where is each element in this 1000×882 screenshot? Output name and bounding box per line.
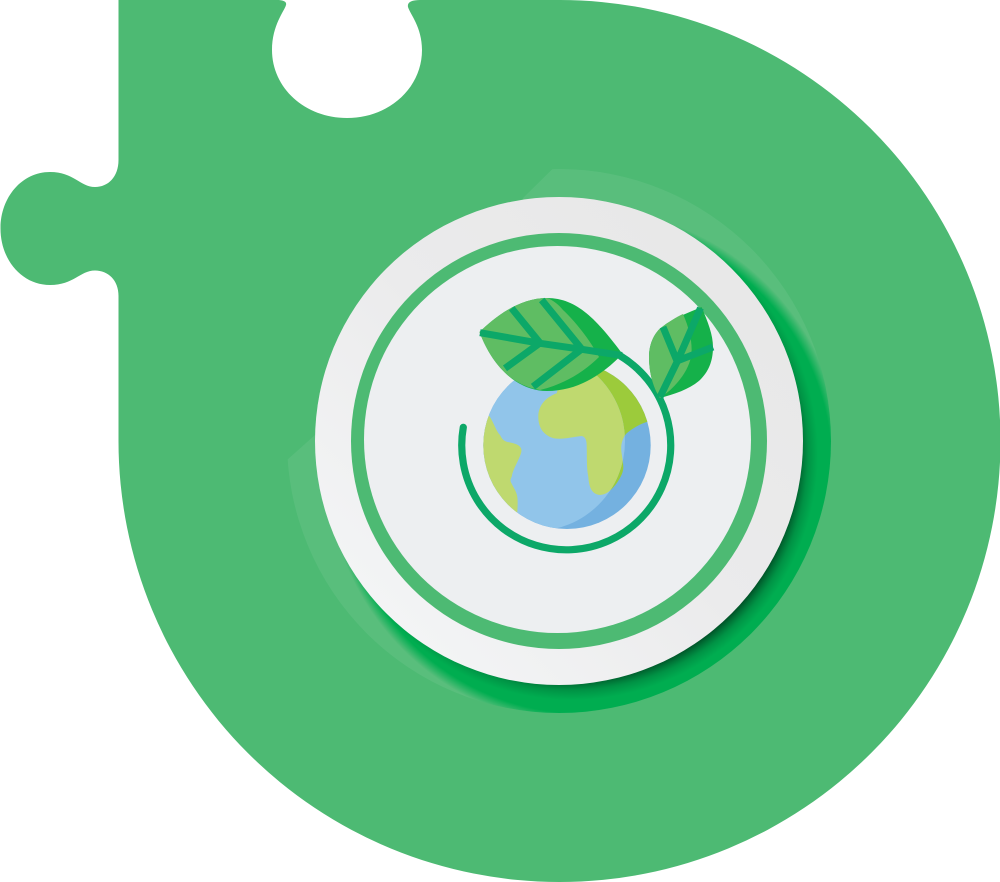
large leaf <box>480 298 622 391</box>
globe <box>483 370 651 529</box>
outer disc <box>315 197 803 685</box>
vine ring <box>462 356 671 550</box>
inner disc <box>364 246 751 633</box>
small leaf <box>649 307 713 398</box>
icon: earth with leaves <box>462 298 713 550</box>
long shadow around disc <box>288 169 831 713</box>
central disc with earth icon <box>315 197 803 685</box>
green ring <box>351 233 767 649</box>
